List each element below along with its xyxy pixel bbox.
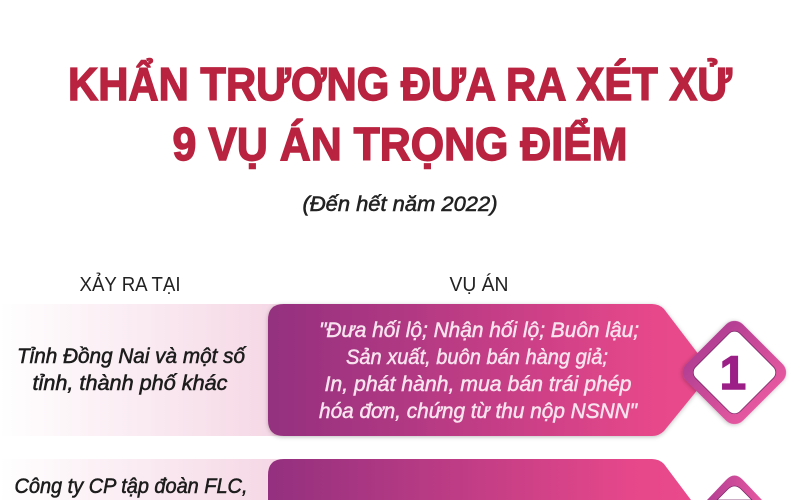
subtitle: (Đến hết năm 2022) [302,193,498,216]
row 1 location text [17,345,247,395]
title: 9 VỤ ÁN TRỌNG ĐIỂM [172,118,628,170]
row 1 case text [319,319,639,423]
row 2 case arrow panel [268,459,691,500]
row 1 location text: tỉnh, thành phố khác [32,372,228,395]
title: KHẨN TRƯƠNG ĐƯA RA XÉT XỬ [68,58,733,110]
row 2 location panel [0,459,285,500]
column heading: case: VỤ ÁN [450,273,508,296]
row 1 case text: hóa đơn, chứng từ thu nộp NSNN" [319,400,639,423]
row 1 location panel [0,304,285,436]
row 1 number badge [678,316,791,429]
row 1 case text: "Đưa hối lộ; Nhận hối lộ; Buôn lậu; [319,319,639,342]
title [68,58,733,170]
row 1 location text: Tỉnh Đồng Nai và một số [17,345,247,368]
row 1 case arrow panel [268,304,712,436]
row 1 case text: In, phát hành, mua bán trái phép [324,373,632,396]
column heading: location: XẢY RA TẠI [80,273,180,296]
row 2 number badge [707,476,762,500]
row 1 number badge: 1 [720,346,746,399]
row 1 case text: Sản xuất, buôn bán hàng giả; [346,346,608,369]
row 2 location text: Công ty CP tập đoàn FLC, [14,475,248,498]
